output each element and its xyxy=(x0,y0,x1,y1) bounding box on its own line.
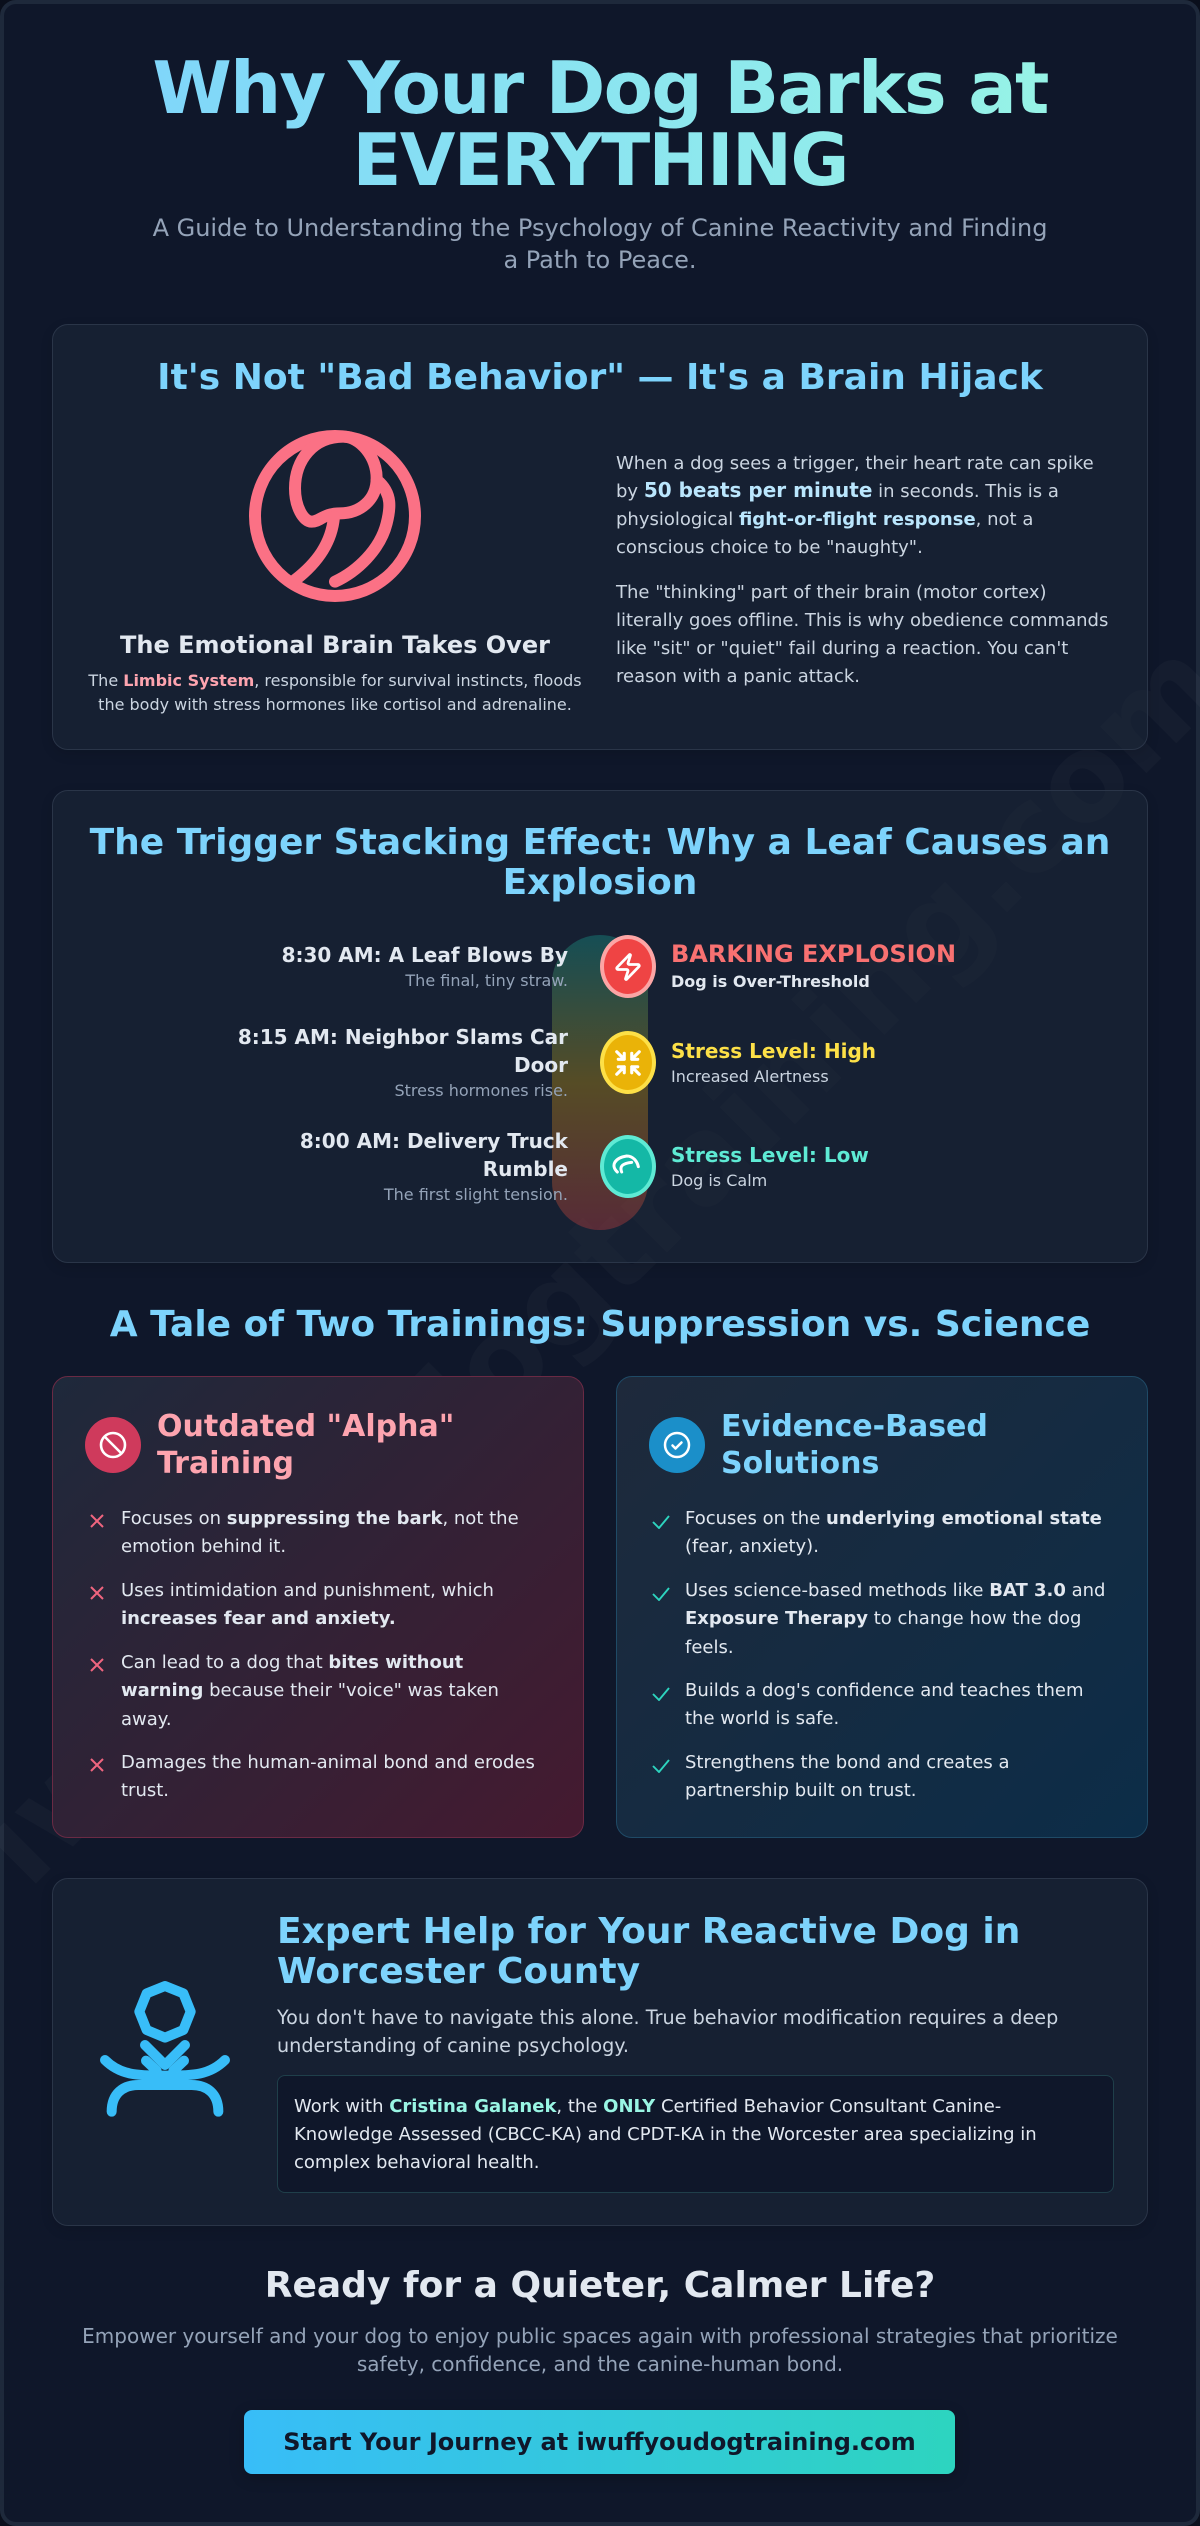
text: thinking brain: reason with a panic attack. xyxy=(616,666,860,687)
button: start your journey xyxy=(244,2410,955,2474)
check 4 xyxy=(652,1759,670,1773)
panel: brain hijack xyxy=(52,324,1148,750)
heading: emotional brain: The Emotional Brain Takes Over xyxy=(120,631,550,659)
heading: alpha training xyxy=(157,1409,454,1480)
panel: expert help xyxy=(52,1878,1148,2226)
text: limbic system xyxy=(88,671,582,714)
text: limbic system: The Limbic System, responsible for survival instincts, floods xyxy=(88,671,582,690)
event: delivery truck: 8:00 AM: Delivery Truck xyxy=(300,1129,568,1153)
event: delivery truck: Rumble xyxy=(483,1157,568,1181)
solution 2: Exposure Therapy to change how the dog xyxy=(685,1608,1081,1629)
panel: trigger stacking xyxy=(52,790,1148,1263)
title: EVERYTHING xyxy=(352,118,848,202)
panel: alpha training xyxy=(52,1376,584,1838)
list item 3: away. xyxy=(121,1709,172,1730)
callout text: Knowledge Assessed (CBCC-KA) and CPDT-KA in the Worcester area specializing in xyxy=(294,2124,1037,2145)
title: Why Your Dog Barks at xyxy=(152,46,1048,130)
icon: ban xyxy=(85,1417,141,1473)
subtitle xyxy=(152,214,1047,274)
mark 4 xyxy=(90,1758,104,1772)
heading: alpha training: Training xyxy=(157,1446,294,1480)
icon: lightning xyxy=(600,935,656,998)
label: stress low: Stress Level: Low xyxy=(671,1143,869,1167)
callout text: Work with Cristina Galanek, the ONLY Certified Behavior Consultant Canine- xyxy=(294,2096,1001,2117)
heading: call to action: Ready for a Quieter, Calmer Life? xyxy=(265,2265,935,2306)
text: limbic system: the body with stress hormones like cortisol and adrenaline. xyxy=(98,695,572,714)
mark 1 xyxy=(90,1514,104,1528)
text: heart rate: conscious choice to be "naughty". xyxy=(616,537,923,558)
icon: calm curve xyxy=(600,1135,656,1198)
text: not alone xyxy=(277,2006,1058,2057)
text: heart rate: by 50 beats per minute in seconds. This is a xyxy=(616,478,1059,502)
heading: trigger stacking: The Trigger Stacking Effect: Why a Leaf Causes an xyxy=(90,822,1110,863)
check 3 xyxy=(652,1687,670,1701)
text: call to action xyxy=(82,2324,1118,2376)
heading: alpha training: Outdated "Alpha" xyxy=(157,1409,454,1444)
text: not alone: understanding of canine psychology. xyxy=(277,2034,629,2057)
icon: shrink arrows xyxy=(600,1031,656,1094)
subtitle: A Guide to Understanding the Psychology of Canine Reactivity and Finding xyxy=(153,214,1047,242)
heading: evidence based: Solutions xyxy=(721,1446,879,1480)
event: neighbor xyxy=(238,1025,568,1077)
list item 4: trust. xyxy=(121,1780,169,1801)
solution 2: feels. xyxy=(685,1637,734,1658)
solution 3 xyxy=(685,1680,1084,1729)
list item 3: Can lead to a dog that bites without xyxy=(121,1652,463,1673)
heading: evidence based: Evidence-Based xyxy=(721,1409,988,1444)
text: heart rate xyxy=(616,453,1094,558)
event: neighbor: 8:15 AM: Neighbor Slams Car xyxy=(238,1025,568,1049)
solution 3: Builds a dog's confidence and teaches them xyxy=(685,1680,1084,1701)
text: call to action: Empower yourself and your dog to enjoy public spaces again with professional strategies that prioritize xyxy=(82,2324,1118,2348)
list item 4: Damages the human-animal bond and erodes xyxy=(121,1752,535,1773)
heading: expert help: Worcester County xyxy=(277,1951,640,1992)
heading: trigger stacking xyxy=(90,822,1110,903)
callout text: complex behavioral health. xyxy=(294,2152,539,2173)
label: stress high: Stress Level: High xyxy=(671,1039,876,1063)
list item 1: Focuses on suppressing the bark, not the xyxy=(121,1508,519,1529)
note: alertness: Increased Alertness xyxy=(671,1067,829,1086)
callout text xyxy=(294,2096,1037,2173)
solution 1: (fear, anxiety). xyxy=(685,1536,819,1557)
mark 2 xyxy=(90,1586,104,1600)
solution 1 xyxy=(685,1508,1102,1557)
list item 1 xyxy=(121,1508,519,1557)
note: calm: Dog is Calm xyxy=(671,1171,767,1190)
event note: delivery truck: The first slight tension. xyxy=(384,1185,568,1204)
event: leaf: 8:30 AM: A Leaf Blows By xyxy=(282,943,568,967)
solution 4 xyxy=(685,1752,1010,1801)
list item 1: emotion behind it. xyxy=(121,1536,286,1557)
text: not alone: You don't have to navigate this alone. True behavior modification requires a deep xyxy=(277,2006,1058,2029)
list item 2: increases fear and anxiety. xyxy=(121,1608,396,1629)
heading: two trainings: A Tale of Two Trainings: Suppression vs. Science xyxy=(110,1304,1090,1345)
check 1 xyxy=(652,1515,670,1529)
list item 3 xyxy=(121,1652,499,1730)
heading: brain hijack: It's Not "Bad Behavior" — It's a Brain Hijack xyxy=(157,357,1043,398)
button: start your journey: Start Your Journey at iwuffyoudogtraining.com xyxy=(283,2428,916,2456)
solution 4: Strengthens the bond and creates a xyxy=(685,1752,1010,1773)
icon: brain xyxy=(249,430,421,602)
timeline gradient bar xyxy=(552,935,648,1230)
solution 4: partnership built on trust. xyxy=(685,1780,917,1801)
solution 3: the world is safe. xyxy=(685,1708,839,1729)
event note: leaf: The final, tiny straw. xyxy=(405,971,568,990)
heading: evidence based xyxy=(721,1409,988,1480)
note: over threshold: Dog is Over-Threshold xyxy=(671,972,870,991)
event: neighbor: Door xyxy=(514,1053,568,1077)
text: thinking brain: literally goes offline. This is why obedience commands xyxy=(616,610,1108,631)
icon: meditating person xyxy=(100,1981,230,2117)
label: barking explosion: BARKING EXPLOSION xyxy=(671,940,956,968)
check 2 xyxy=(652,1587,670,1601)
text: heart rate: When a dog sees a trigger, their heart rate can spike xyxy=(616,453,1094,474)
text: call to action: safety, confidence, and the canine-human bond. xyxy=(357,2352,843,2376)
text: thinking brain xyxy=(616,582,1108,687)
callout: Cristina Galanek xyxy=(277,2075,1114,2193)
solution 2 xyxy=(685,1580,1105,1658)
subtitle: a Path to Peace. xyxy=(503,246,697,274)
heading: trigger stacking: Explosion xyxy=(503,862,697,903)
title xyxy=(52,52,1148,196)
list item 4 xyxy=(121,1752,535,1801)
panel: evidence based xyxy=(616,1376,1148,1838)
text: heart rate: physiological fight-or-flight response, not a xyxy=(616,509,1033,530)
text: thinking brain: The "thinking" part of their brain (motor cortex) xyxy=(616,582,1047,603)
list item 2: Uses intimidation and punishment, which xyxy=(121,1580,494,1601)
solution 2: Uses science-based methods like BAT 3.0 and xyxy=(685,1580,1105,1601)
mark 3 xyxy=(90,1658,104,1672)
icon: check circle xyxy=(649,1417,705,1473)
heading: expert help xyxy=(277,1911,1020,1992)
event: delivery truck xyxy=(300,1129,568,1181)
event note: neighbor: Stress hormones rise. xyxy=(394,1081,568,1100)
solution 1: Focuses on the underlying emotional state xyxy=(685,1508,1102,1529)
list item 3: warning because their "voice" was taken xyxy=(121,1680,499,1701)
list item 2 xyxy=(121,1580,494,1629)
text: thinking brain: like "sit" or "quiet" fail during a reaction. You can't xyxy=(616,638,1068,659)
heading: expert help: Expert Help for Your Reactive Dog in xyxy=(277,1911,1020,1952)
